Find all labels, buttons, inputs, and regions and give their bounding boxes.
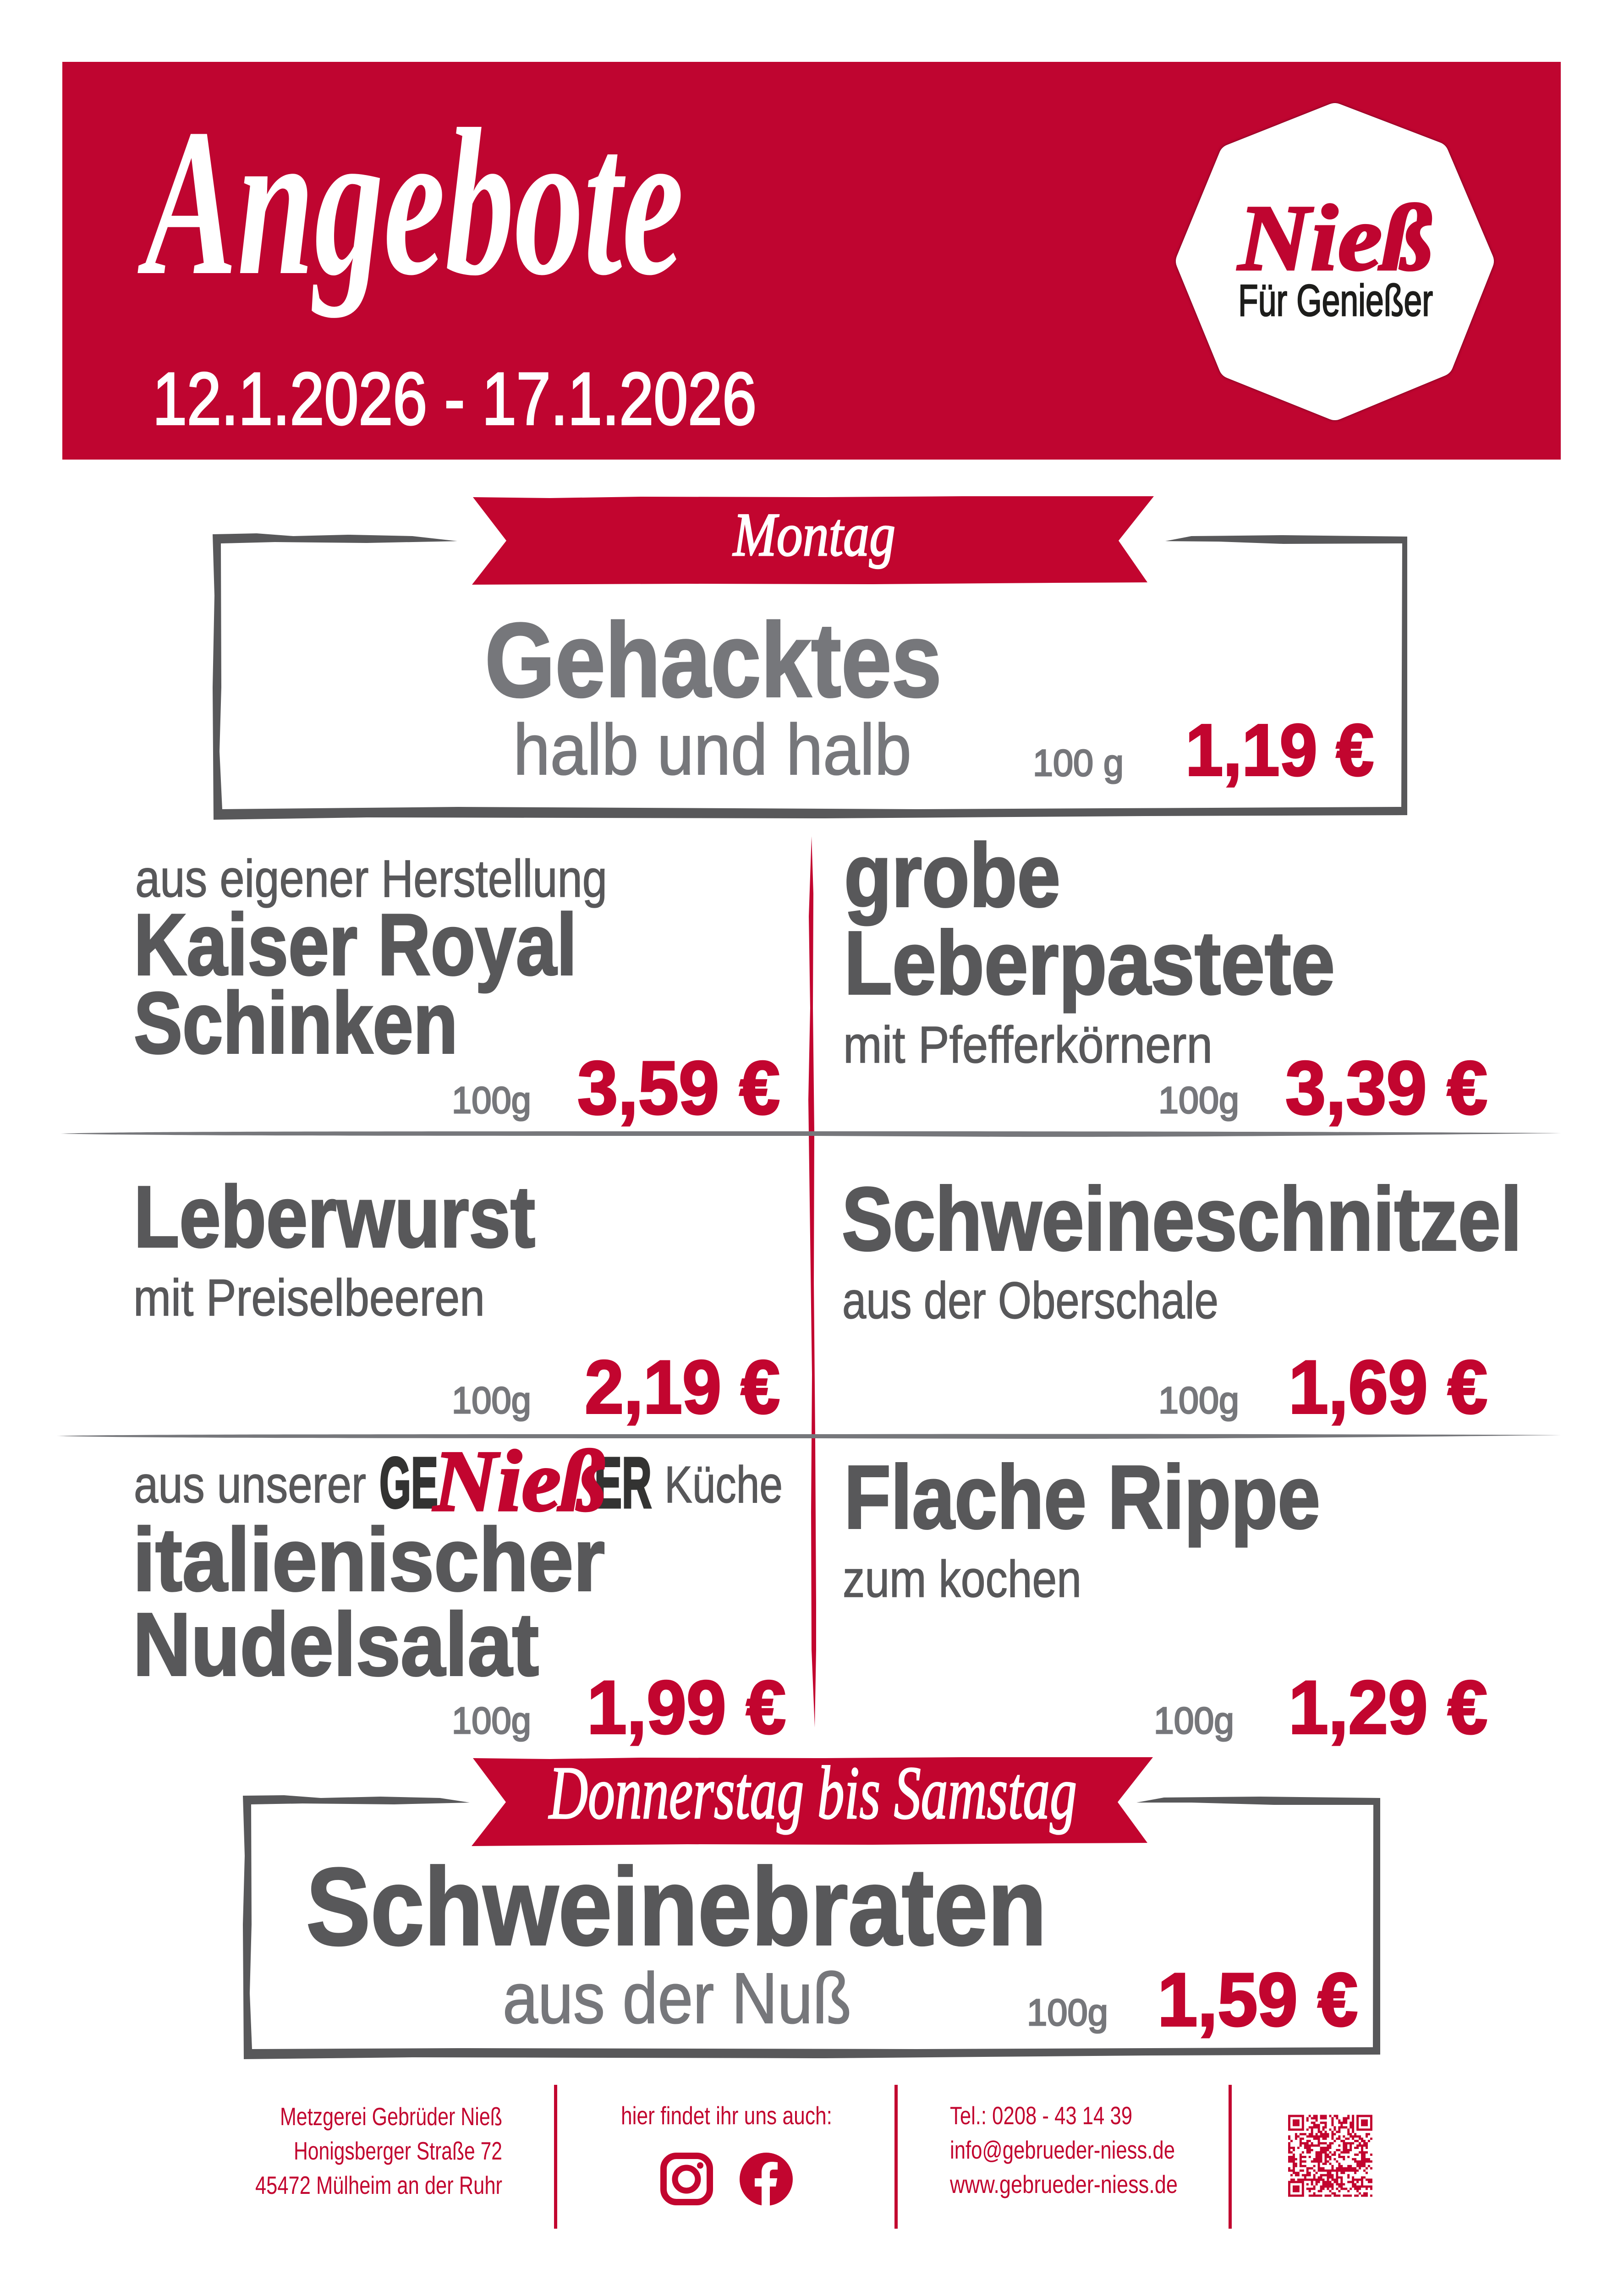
logo wordmark: Nieß [1237, 186, 1432, 290]
price: 2,19 € [585, 1345, 780, 1429]
product detail: halb und halb: halb und halb [513, 710, 911, 790]
unit: 100g [452, 1080, 531, 1121]
unit: 100g [1158, 1380, 1239, 1421]
note with brand lettering: aus unserer [134, 1456, 366, 1513]
address block [255, 2102, 502, 2199]
logo tagline: Für Genießer [1238, 275, 1433, 325]
header banner [62, 62, 1561, 460]
product note: zum kochen [843, 1550, 1081, 1608]
footer divider 1 [554, 2085, 557, 2229]
contact block [949, 2101, 1178, 2198]
footer divider 3 [1229, 2085, 1232, 2229]
ribbon: Montag [472, 496, 1154, 585]
product detail: aus der Nuß: aus der Nuß [503, 1958, 851, 2039]
date range: 12.1.2026 - 17.1.2026 [153, 357, 757, 440]
product name line 2: Nudelsalat [133, 1595, 539, 1694]
product note: aus der Oberschale [842, 1272, 1218, 1329]
ribbon label: Montag: Montag [732, 501, 895, 569]
price: 3,39 € [1285, 1046, 1487, 1130]
price: 1,29 € [1289, 1665, 1487, 1749]
divider: first horizontal line [60, 1131, 1561, 1137]
product name line 1: italienischer [133, 1510, 605, 1610]
product note: mit Pfefferkörnern [843, 1016, 1213, 1074]
product name line 1: grobe [844, 825, 1060, 926]
note with brand lettering: Nieß [433, 1433, 605, 1529]
product name line 2: Leberpastete [844, 913, 1335, 1013]
product name: Schweineschnitzel [842, 1169, 1522, 1269]
contact block: Tel.: 0208 - 43 14 39 [950, 2101, 1132, 2130]
note with brand lettering: ER [594, 1443, 652, 1523]
icon: Facebook [740, 2153, 793, 2206]
panel: grobe Leberpastete [843, 825, 1487, 1130]
panel: Schweineschnitzel [842, 1169, 1522, 1429]
price: 1,99 € [587, 1665, 786, 1749]
footer [255, 2085, 1372, 2229]
unit: 100g [452, 1380, 531, 1421]
panel: Kaiser Royal Schinken [134, 850, 780, 1130]
price: 1,19 €: 1,19 € [1185, 709, 1374, 791]
divider: second horizontal line [57, 1434, 1561, 1439]
product note: aus eigener Herstellung [135, 850, 607, 908]
product name: Schweinebraten: Schweinebraten [306, 1845, 1047, 1968]
contact block: www.gebrueder-niess.de [949, 2170, 1178, 2198]
note with brand lettering: GE [379, 1443, 438, 1523]
QR code [1288, 2116, 1372, 2196]
panel: Donnerstag bis Samstag offer [243, 1751, 1380, 2059]
unit: 100g [1027, 1992, 1108, 2033]
unit: 100g [1158, 1080, 1239, 1121]
unit: 100g [1154, 1700, 1234, 1742]
icon: Instagram [664, 2156, 710, 2202]
address block: 45472 Mülheim an der Ruhr [255, 2171, 502, 2199]
product name: Leberwurst [134, 1168, 535, 1266]
panel: italienischer Nudelsalat [133, 1433, 786, 1749]
price: 1,59 € [1158, 1957, 1358, 2042]
product name: Flache Rippe [844, 1447, 1320, 1547]
contact block: info@gebrueder-niess.de [950, 2136, 1175, 2164]
address block: Metzgerei Gebrüder Nieß [280, 2102, 502, 2131]
price: 3,59 € [577, 1046, 780, 1130]
price: 1,69 € [1289, 1345, 1487, 1429]
product note: mit Preiselbeeren [133, 1269, 485, 1326]
panel: Flache Rippe [843, 1447, 1487, 1749]
note with brand lettering: Küche [664, 1456, 783, 1513]
footer divider 2 [894, 2085, 898, 2229]
unit: 100g [452, 1700, 531, 1742]
box frame: Donnerstag bis Samstag [243, 1795, 1380, 2059]
product name line 1: Kaiser Royal [134, 896, 577, 993]
box frame: Montag [213, 533, 1407, 820]
social heading: hier findet ihr uns auch: [621, 2101, 832, 2130]
address block: Honigsberger Straße 72 [294, 2137, 502, 2165]
product name line 2: Schinken [134, 975, 458, 1072]
panel: Leberwurst [133, 1168, 780, 1429]
ribbon: Donnerstag bis Samstag [472, 1751, 1153, 1846]
unit: 100 g: 100 g [1033, 742, 1124, 784]
ribbon label: Donnerstag bis Samstag [549, 1751, 1077, 1835]
product name: Gehacktes: Gehacktes [485, 601, 942, 719]
note with brand lettering [134, 1433, 783, 1529]
logo badge [1190, 117, 1480, 406]
divider: vertical red line [808, 836, 816, 1727]
title: Angebote: Angebote [136, 85, 684, 319]
panel: Montag offer [213, 496, 1407, 820]
